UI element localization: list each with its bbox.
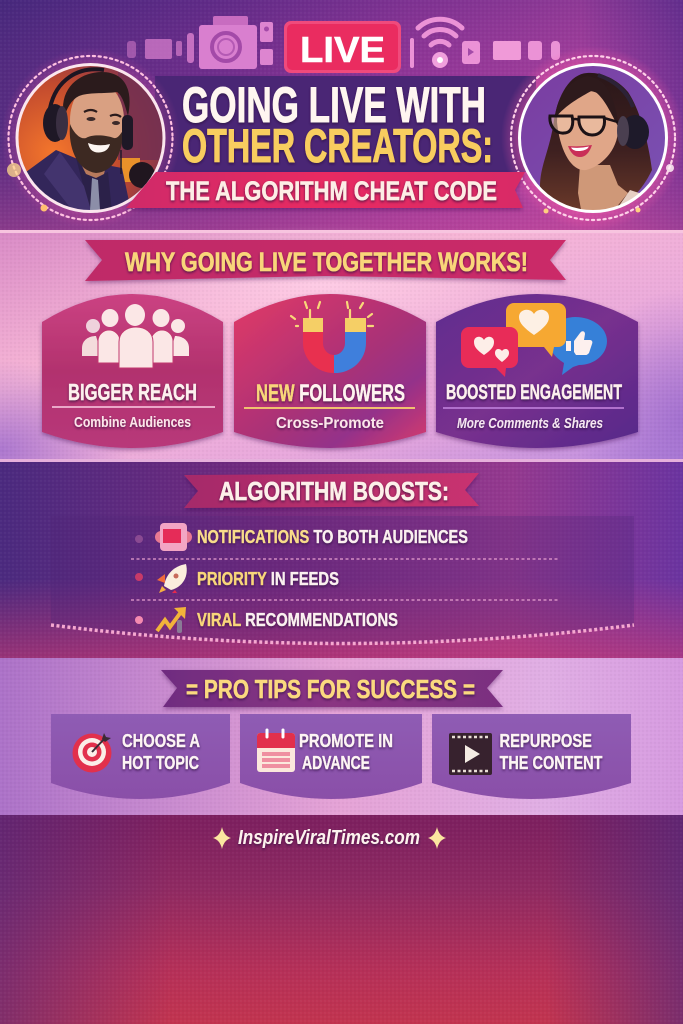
beard bbox=[70, 124, 124, 173]
face bbox=[70, 92, 124, 138]
icon: magnet bbox=[291, 302, 373, 373]
title text bbox=[182, 77, 493, 172]
background: pro tips section bbox=[0, 658, 683, 815]
panel: promote in advance: ADVANCE bbox=[302, 752, 370, 773]
icon: camera bbox=[199, 16, 257, 69]
icon: target bbox=[72, 733, 112, 772]
list item: viral recommendations: VIRAL RECOMMENDATIONS bbox=[197, 609, 398, 630]
panel: repurpose the content: REPURPOSE bbox=[500, 730, 592, 751]
panel: new followers: Cross-Promote bbox=[276, 415, 384, 432]
panel: bigger reach: BIGGER REACH bbox=[68, 379, 197, 405]
panel: boosted engagement: More Comments & Shares bbox=[457, 415, 603, 432]
heading ribbon: pro tips bbox=[161, 670, 503, 707]
left host portrait bbox=[0, 48, 180, 228]
right host portrait bbox=[501, 46, 683, 230]
icon: group of people bbox=[82, 304, 189, 368]
panel: bigger reach: Combine Audiences bbox=[74, 414, 191, 431]
list item: viral recommendations bbox=[135, 607, 398, 633]
panel: algorithm boosts list bbox=[51, 516, 634, 644]
icon: calendar bbox=[257, 730, 295, 772]
live badge: LIVE bbox=[300, 29, 385, 70]
panel: choose a hot topic bbox=[51, 714, 230, 799]
headphones bbox=[50, 69, 104, 108]
heading ribbon: pro tips: = PRO TIPS FOR SUCCESS = bbox=[186, 674, 475, 704]
heading ribbon: why going live together works: WHY GOING LIVE TOGETHER WORKS! bbox=[125, 247, 528, 277]
top icon strip: wifi and video bbox=[410, 19, 560, 68]
smile bbox=[88, 143, 110, 153]
list item: priority in feeds: PRIORITY IN FEEDS bbox=[197, 568, 339, 589]
panel: choose a hot topic: HOT TOPIC bbox=[122, 752, 199, 773]
background: why section bbox=[0, 225, 683, 550]
icon: film strip bbox=[449, 733, 492, 775]
panel: boosted engagement bbox=[436, 294, 638, 448]
eyes bbox=[86, 117, 96, 121]
list item: priority in feeds bbox=[135, 564, 339, 593]
icon: wifi bbox=[418, 19, 462, 68]
list item: notifications: NOTIFICATIONS TO BOTH AUDIENCES bbox=[197, 526, 468, 547]
icon: sparkle left bbox=[213, 827, 231, 849]
list item: notifications bbox=[135, 523, 468, 551]
heading ribbon: algorithm boosts: ALGORITHM BOOSTS: bbox=[219, 476, 449, 506]
shirt bbox=[26, 150, 128, 207]
subtitle ribbon bbox=[126, 172, 525, 208]
panel: repurpose the content: THE CONTENT bbox=[500, 752, 603, 773]
footer website credit: InspireViralTimes.com bbox=[238, 827, 420, 849]
icon: rocket bbox=[157, 564, 187, 593]
icon: phone notification bbox=[155, 523, 192, 551]
icon: sparkle right bbox=[428, 827, 446, 849]
top icon strip: camera and gadgets bbox=[127, 16, 273, 69]
panel: new followers bbox=[234, 294, 426, 448]
panel: promote in advance bbox=[240, 714, 422, 799]
neck bbox=[82, 166, 105, 178]
hair bbox=[540, 73, 652, 214]
icon: reaction bubbles bbox=[461, 303, 607, 377]
headset bbox=[598, 75, 633, 107]
icon: rising arrow bbox=[157, 607, 186, 633]
glasses bbox=[550, 116, 604, 135]
face bbox=[557, 91, 618, 170]
title banner bbox=[155, 76, 536, 172]
title text: OTHER CREATORS: bbox=[182, 119, 493, 172]
panel: promote in advance: PROMOTE IN bbox=[299, 730, 393, 751]
panel: repurpose the content bbox=[432, 714, 631, 799]
panel: choose a hot topic: CHOOSE A bbox=[122, 730, 200, 751]
panel: new followers: NEW FOLLOWERS bbox=[256, 380, 405, 407]
heading ribbon: why going live together works bbox=[85, 240, 566, 281]
background: header bbox=[0, 0, 683, 232]
panel: bigger reach bbox=[42, 294, 223, 448]
live badge bbox=[284, 21, 401, 73]
neck and chest bbox=[578, 165, 628, 215]
title text: GOING LIVE WITH bbox=[182, 77, 486, 133]
background: algorithm section bbox=[0, 459, 683, 658]
hair bbox=[63, 72, 130, 118]
background: footer bbox=[0, 815, 683, 1024]
subtitle ribbon: THE ALGORITHM CHEAT CODE bbox=[166, 176, 497, 206]
